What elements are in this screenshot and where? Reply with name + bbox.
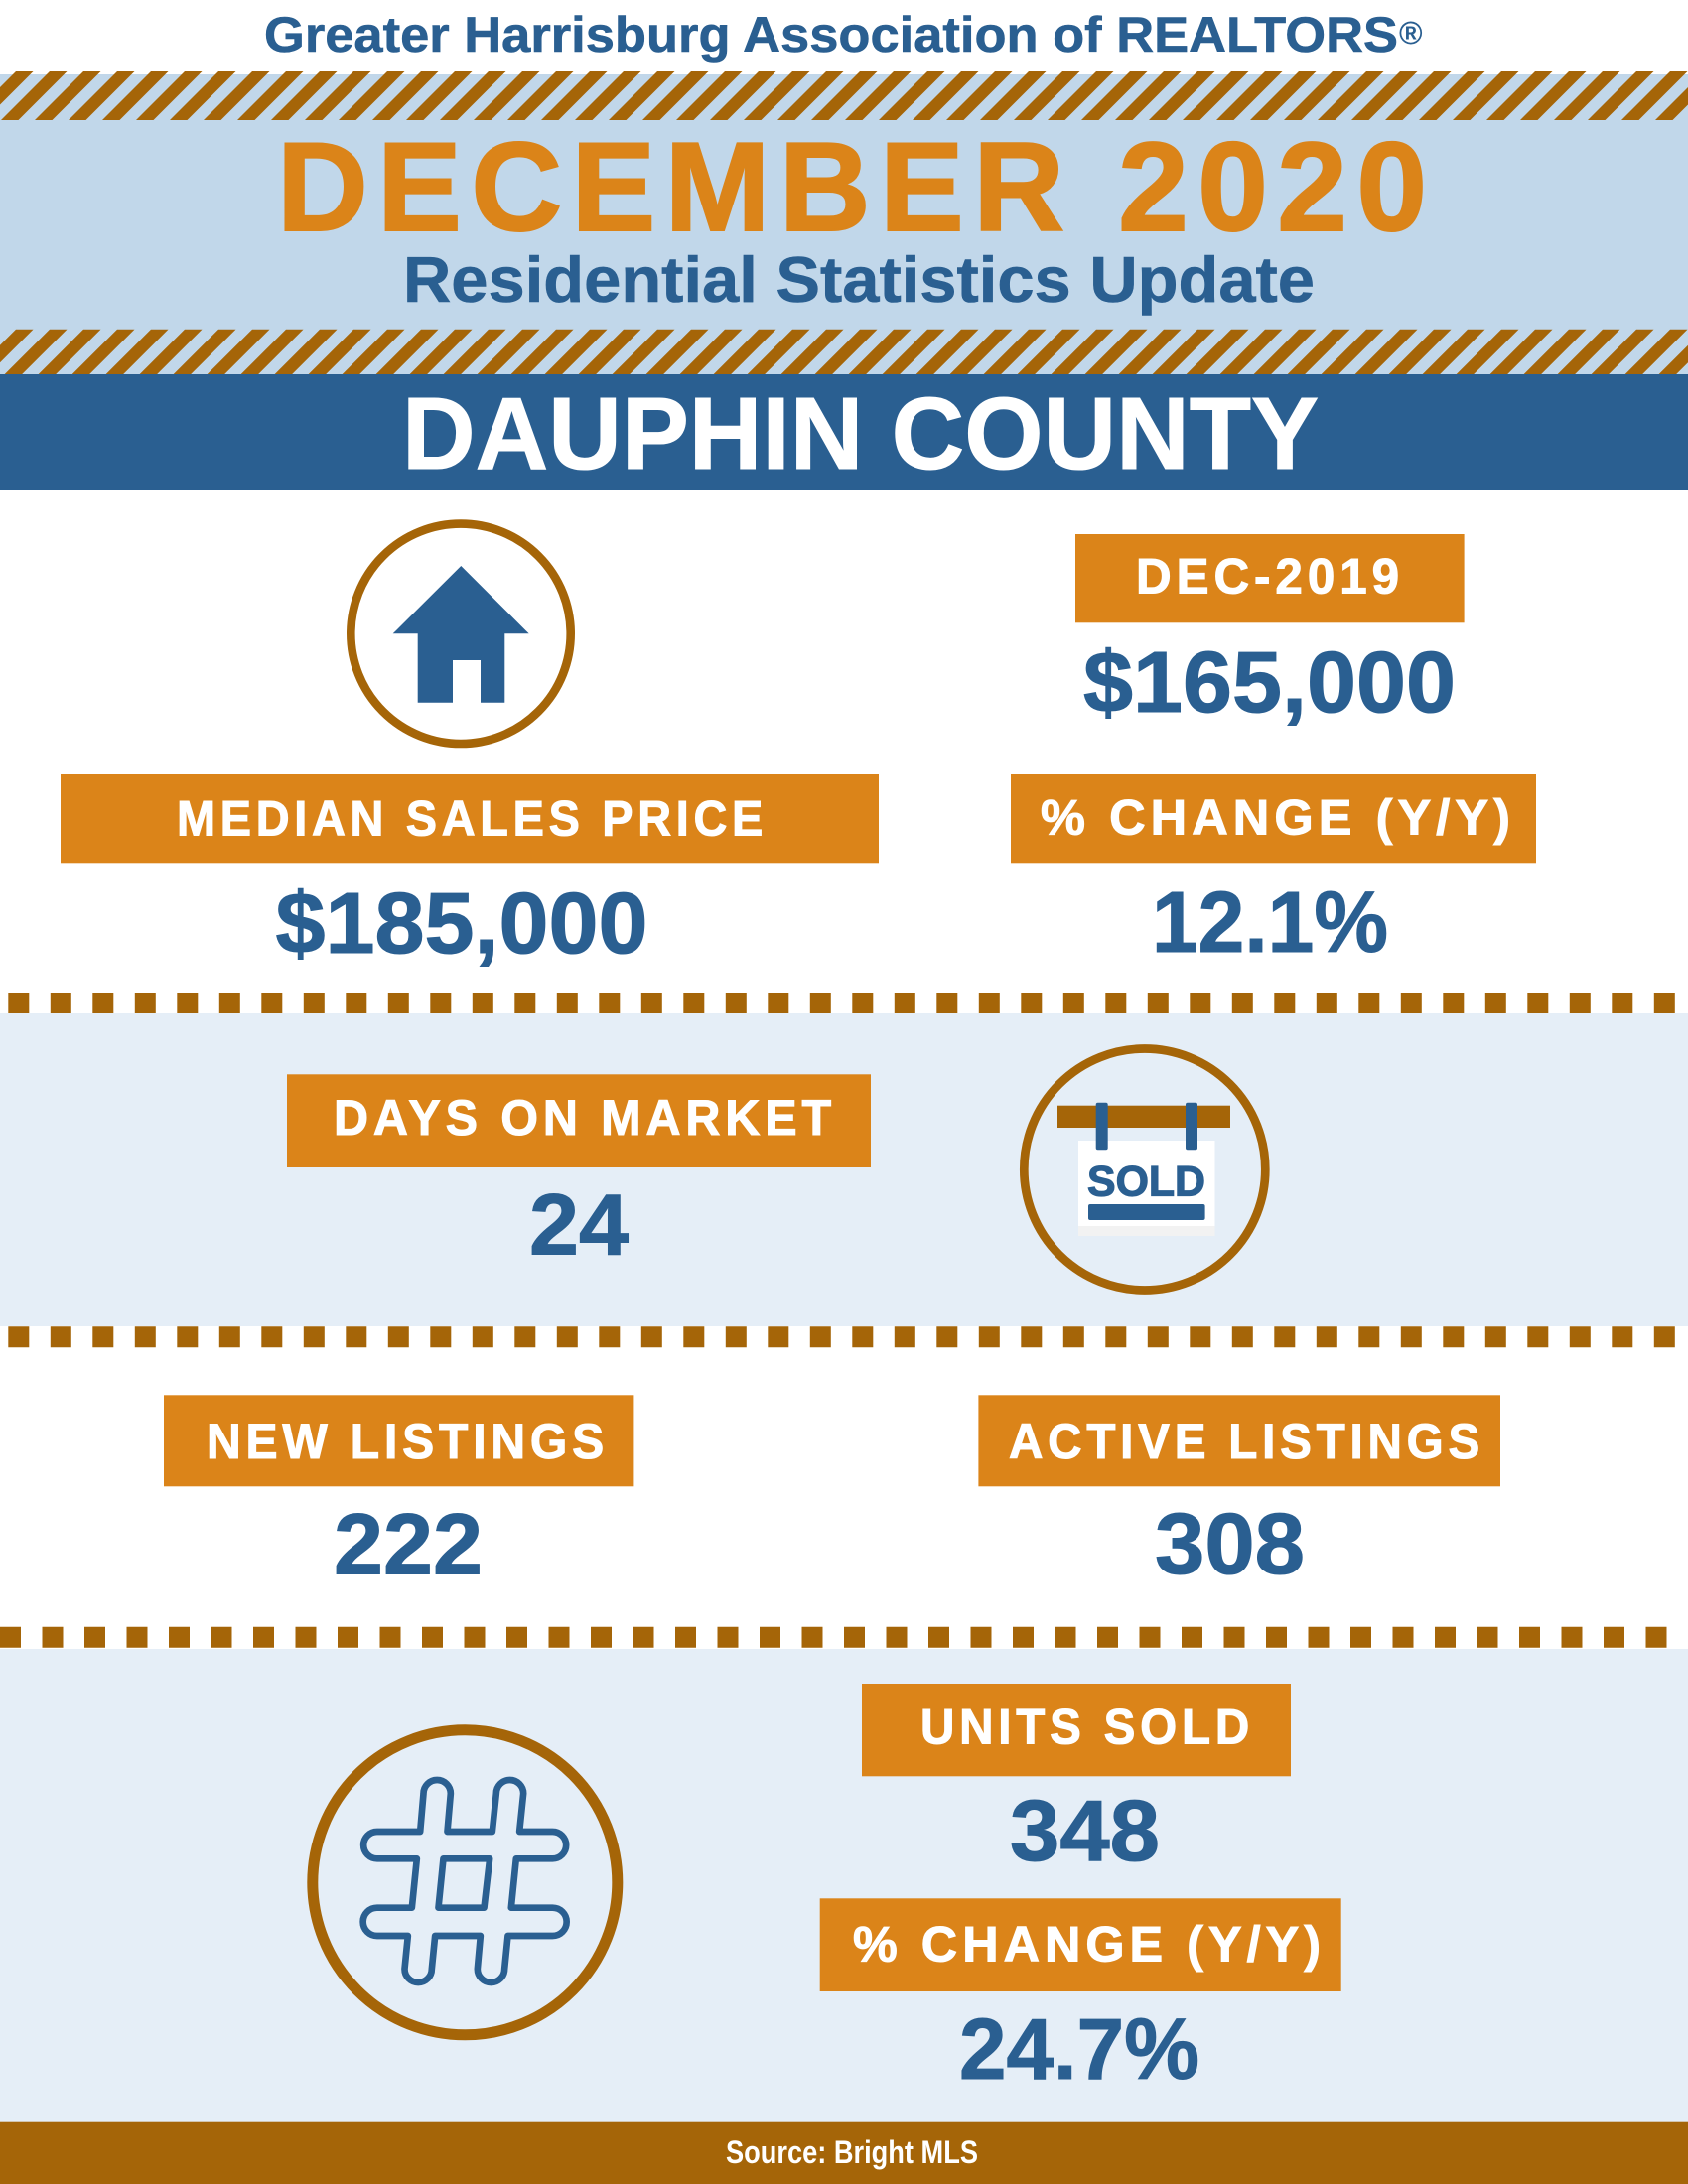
organisation title: Greater Harrisburg Association of REALTORS: [264, 7, 1398, 63]
label: active listings: [978, 1395, 1500, 1486]
label: new listings: [164, 1395, 633, 1486]
label: percent change price: [1011, 774, 1536, 863]
organisation title: ®: [1399, 15, 1423, 51]
label: dec-2019: DEC-2019: [1136, 549, 1404, 605]
subheading: Residential Statistics Update: [403, 243, 1315, 316]
label: units sold: [862, 1684, 1291, 1776]
label: percent change units: % CHANGE (Y/Y): [853, 1917, 1326, 1973]
value: units sold: 348: [1010, 1783, 1160, 1879]
panel: median sales price: [61, 524, 1536, 972]
label: percent change units: [820, 1898, 1341, 1991]
icon: sold sign: [1024, 1048, 1265, 1291]
footer: source: [0, 2122, 1688, 2184]
county banner: DAUPHIN COUNTY: [402, 376, 1319, 490]
icon: house: [351, 524, 571, 744]
value: dec-2019 price: $165,000: [1083, 634, 1456, 731]
value: median sales price: $185,000: [276, 876, 647, 972]
label: new listings: NEW LISTINGS: [207, 1414, 609, 1469]
value: price change: 12.1%: [1152, 875, 1388, 971]
county banner: [0, 374, 1688, 490]
label: percent change price: % CHANGE (Y/Y): [1041, 790, 1515, 846]
label: active listings: ACTIVE LISTINGS: [1009, 1414, 1484, 1469]
header band: [0, 74, 1688, 374]
main heading: DECEMBER 2020: [277, 116, 1427, 257]
label: days on market: [287, 1074, 871, 1167]
label: median sales price: MEDIAN SALES PRICE: [177, 790, 768, 846]
value: new listings: 222: [334, 1497, 483, 1592]
panel: listings: [164, 1395, 1500, 1592]
icon: hash symbol: [313, 1730, 618, 2035]
panel: days on market: [0, 1013, 1688, 1326]
value: days on market: 24: [529, 1177, 629, 1274]
value: active listings: 308: [1155, 1496, 1305, 1592]
label: days on market: DAYS ON MARKET: [334, 1090, 836, 1146]
footer: source: Source: Bright MLS: [726, 2134, 978, 2170]
label: dec-2019: [1075, 534, 1465, 622]
panel: units sold: [0, 1649, 1688, 2122]
icon: sold sign: SOLD: [1087, 1158, 1205, 1205]
label: units sold: UNITS SOLD: [920, 1700, 1254, 1755]
value: units change: 24.7%: [959, 2001, 1199, 2098]
label: median sales price: [61, 774, 879, 863]
